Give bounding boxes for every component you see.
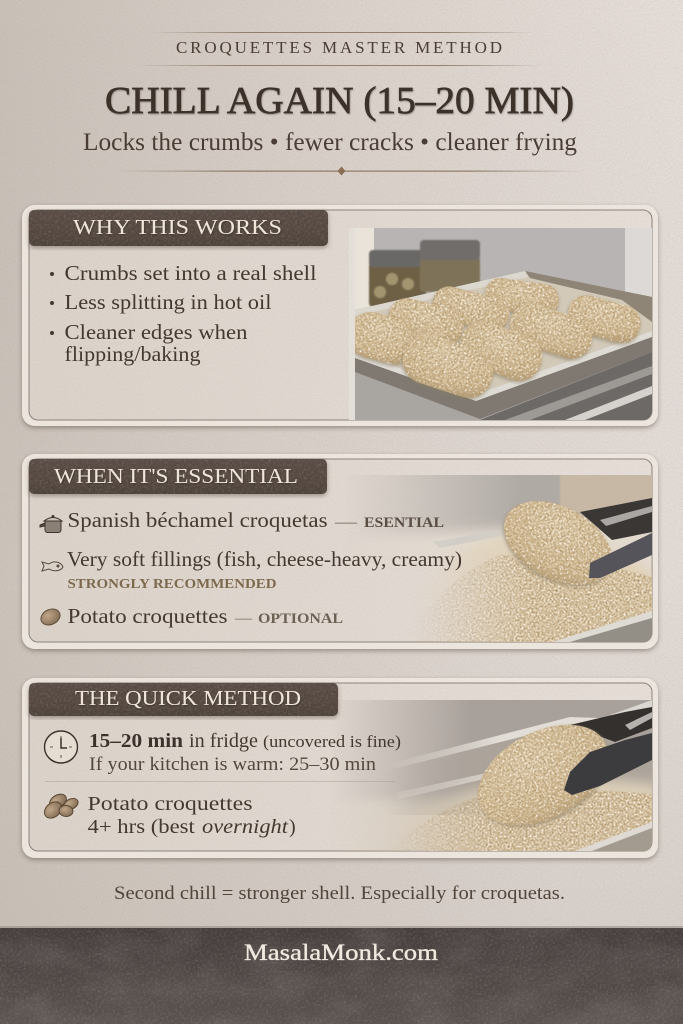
icon: fish [42, 562, 63, 571]
icon: potatoes [41, 791, 80, 821]
croquettes [343, 276, 645, 404]
title: CHILL AGAIN (15–20 MIN) [105, 80, 574, 122]
jars [369, 240, 480, 307]
closing note: Second chill = stronger shell. Especially for croquetas. [114, 883, 565, 904]
panel: why this works [22, 205, 658, 426]
photo: croquette lifted from crumbs [373, 475, 652, 642]
section header: WHEN IT'S ESSENTIAL [54, 464, 298, 488]
panel: when it's essential [22, 454, 660, 660]
row: fridge time: (uncovered is fine) [263, 732, 401, 751]
row: potato croquettes: — [234, 610, 253, 627]
row: spanish bechamel: Spanish béchamel croquetas [68, 508, 328, 532]
section header [29, 683, 338, 716]
icon: pot [40, 516, 62, 532]
row: fridge time: in fridge [189, 731, 258, 752]
row: spanish bechamel: — [334, 514, 358, 531]
tray [355, 271, 652, 419]
subtitle: Locks the crumbs • fewer cracks • cleaner frying [83, 129, 578, 156]
row: potato croquettes: OPTIONAL [258, 611, 343, 627]
footer brand: MasalaMonk.com [244, 940, 438, 965]
row: very soft fillings: STRONGLY RECOMMENDED [68, 576, 277, 591]
row: fridge time: 15–20 min [89, 731, 183, 752]
row: fridge time [89, 731, 401, 775]
row: potato croquettes [68, 604, 343, 628]
header kicker with rules: CROQUETTES MASTER METHOD [176, 38, 502, 57]
panel: the quick method [22, 678, 660, 870]
row: potato croquettes chill: ) [289, 816, 296, 838]
tongs [570, 707, 652, 742]
row: potato croquettes chill: Potato croquettes [88, 793, 253, 815]
bullet list: Cleaner edges when [64, 320, 248, 344]
row: spanish bechamel: ESENTIAL [364, 515, 444, 531]
photo: croquette rolled in crumbs [348, 700, 652, 851]
card frame [22, 454, 658, 649]
divider [45, 781, 395, 782]
section header [29, 210, 328, 246]
card frame [22, 678, 658, 858]
footer band [0, 926, 683, 1024]
bullet list: Crumbs set into a real shell [64, 261, 317, 285]
photo: croquettes on tray in fridge [343, 228, 652, 420]
bullet list [50, 261, 317, 366]
card frame [22, 205, 658, 426]
row: spanish bechamel [68, 508, 444, 532]
shelf [355, 363, 624, 420]
row: very soft fillings: Very soft fillings (fish, cheese-heavy, creamy) [67, 547, 462, 571]
row: potato croquettes: Potato croquettes [68, 604, 228, 628]
icon: clock [44, 731, 78, 763]
row: potato croquettes chill: 4+ hrs (best [88, 816, 200, 838]
section header: THE QUICK METHOD [75, 686, 301, 710]
row: potato croquettes chill [88, 793, 296, 838]
section header [29, 459, 327, 494]
section header: WHY THIS WORKS [73, 215, 282, 239]
row: very soft fillings [67, 547, 462, 591]
bullet list: flipping/baking [64, 342, 201, 366]
icon: potato [38, 606, 63, 628]
bullet list: Less splitting in hot oil [64, 290, 272, 314]
row: fridge time: If your kitchen is warm: 25–30 min [89, 754, 377, 775]
tongs [580, 498, 652, 540]
row: potato croquettes chill: overnight [202, 816, 288, 838]
ornamental divider [115, 166, 585, 176]
